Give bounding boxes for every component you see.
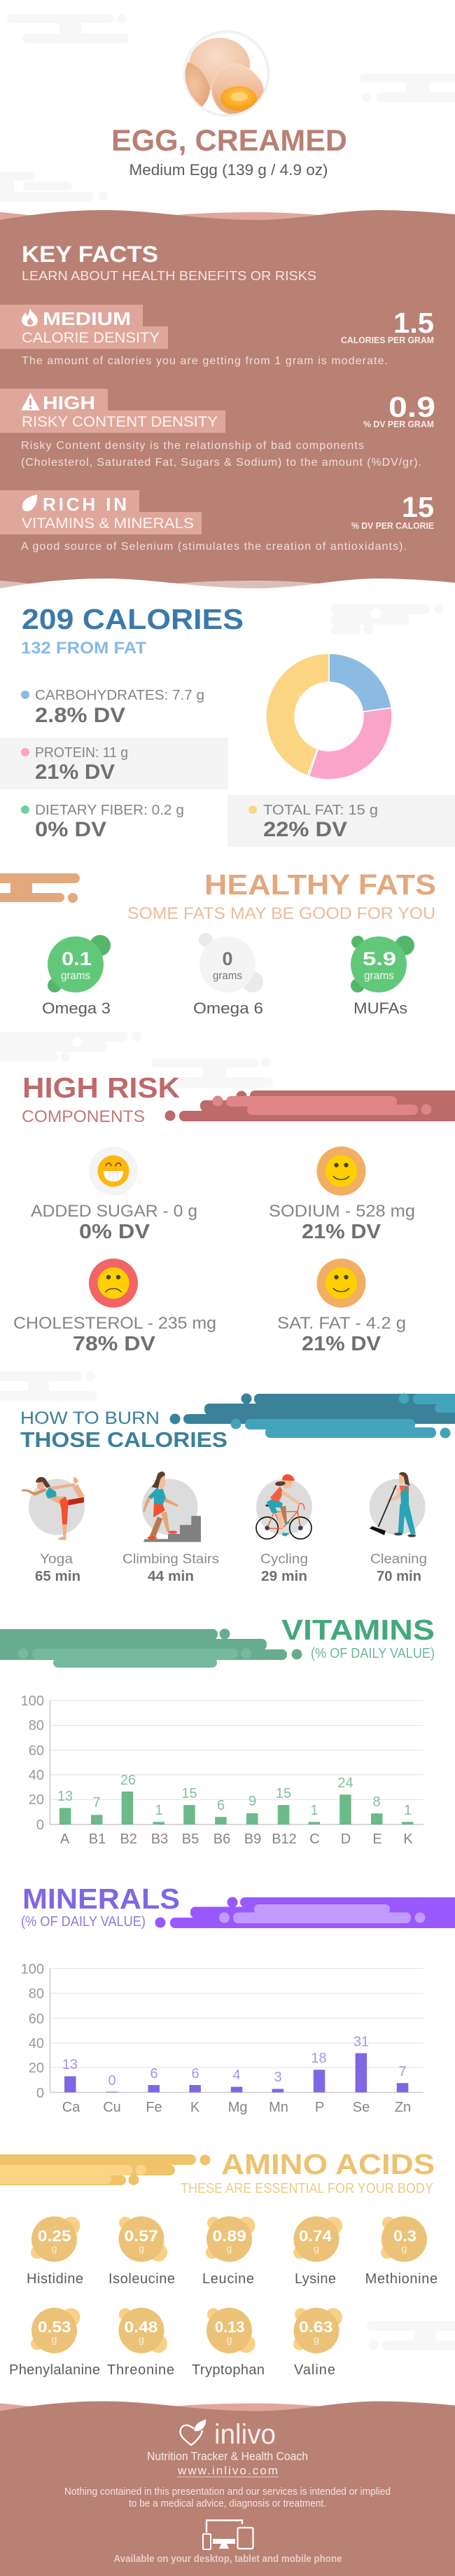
fat: mufas: grams <box>364 970 394 982</box>
value: 0.9: 0.9 <box>388 391 435 423</box>
y axis labels: 100 <box>21 1694 44 1709</box>
icon: frowning face <box>89 1259 138 1308</box>
amino acid: phenylalanine <box>9 2308 100 2378</box>
x axis labels: B9 <box>244 1831 261 1847</box>
bar values: 18 <box>311 2051 327 2066</box>
risk: cholesterol: CHOLESTEROL - 235 mg <box>13 1314 216 1333</box>
bar values: 13 <box>62 2057 78 2072</box>
y axis labels: 80 <box>29 1718 44 1733</box>
subheading: minerals: (% OF DAILY VALUE) <box>21 1914 146 1930</box>
bar values: 6 <box>217 1798 225 1813</box>
x axis labels: D <box>341 1831 351 1847</box>
amino acid: methionine: Methionine <box>365 2271 438 2287</box>
fat: omega 3: 0.1 <box>62 948 92 969</box>
bar values: 15 <box>276 1786 291 1801</box>
x axis labels: A <box>60 1831 70 1847</box>
fat: omega 6 <box>193 933 263 1017</box>
bar values: 7 <box>92 1795 101 1810</box>
amino acid: threonine: Threonine <box>107 2362 174 2378</box>
y axis labels <box>21 1694 44 1833</box>
value: 1.5: 1.5 <box>393 307 434 339</box>
bar values: 1 <box>155 1803 163 1818</box>
bar values: 4 <box>232 2068 241 2083</box>
background cloud: calories <box>331 604 444 635</box>
icon: smiling face <box>316 1147 365 1196</box>
bar values: 8 <box>372 1794 381 1810</box>
risk: cholesterol <box>13 1259 216 1355</box>
amino acid: phenylalanine: 0.53 <box>38 2318 71 2336</box>
bar values: 6 <box>150 2066 158 2082</box>
amino acid: leucine <box>202 2216 255 2287</box>
icon: smiling face <box>316 1259 365 1308</box>
bottom wave of key facts panel <box>0 579 455 602</box>
nutrient: protein: 21% DV <box>35 761 115 784</box>
nutrient: carbohydrates: 2.8% DV <box>35 704 125 727</box>
x axis labels: B2 <box>120 1831 137 1847</box>
x axis labels: Zn <box>395 2100 411 2115</box>
subtitle: Medium Egg (139 g / 4.9 oz) <box>129 161 328 179</box>
amino acid: leucine: 0.89 <box>213 2227 246 2245</box>
bar values: 0 <box>108 2073 116 2089</box>
panel: key facts <box>0 210 455 602</box>
nutrient: carbohydrates: CARBOHYDRATES: 7.7 g <box>35 688 204 703</box>
gridlines <box>50 1701 424 1800</box>
activity: cycling: 29 min <box>261 1569 307 1584</box>
nutrient: dietary fiber <box>21 803 184 841</box>
y axis labels <box>21 1962 44 2101</box>
bar values <box>62 2034 407 2089</box>
icon: cleaning figure <box>370 1472 426 1537</box>
nutrient: total fat: 22% DV <box>263 818 347 841</box>
nutrient: total fat <box>227 795 455 847</box>
disclaimer: Nothing contained in this presentation and our services is intended or implied <box>64 2486 391 2498</box>
risk: saturated fat <box>277 1259 406 1355</box>
x axis labels: Mg <box>228 2100 247 2115</box>
subheading: from fat: 132 FROM FAT <box>21 639 146 658</box>
decoration: minerals pills <box>155 1897 455 1928</box>
risk: sodium <box>269 1147 415 1243</box>
x axis labels: C <box>309 1831 320 1847</box>
label: calorie density: CALORIE DENSITY <box>22 330 160 346</box>
x axis labels: B5 <box>182 1831 199 1847</box>
amino acid: methionine: 0.3 <box>393 2227 416 2245</box>
icon: inlivo heart logo <box>181 2421 205 2445</box>
amino acid: lysine: g <box>314 2243 319 2254</box>
bar values: 1 <box>310 1803 318 1818</box>
label: risky content density: RISKY CONTENT DENSITY <box>22 414 218 430</box>
fact: calorie density <box>0 305 434 367</box>
amino acid: leucine: g <box>227 2243 232 2254</box>
activity: cleaning: 70 min <box>377 1569 421 1584</box>
heading: high risk: HIGH RISK <box>22 1072 180 1104</box>
heading: those calories: THOSE CALORIES <box>20 1428 227 1452</box>
amino acid: phenylalanine: Phenylalanine <box>9 2362 100 2378</box>
panel: footer <box>0 2401 455 2576</box>
description: A good source of Selenium (stimulates the creation of antioxidants). <box>21 541 407 553</box>
activity: cycling <box>256 1474 312 1584</box>
subheading: vitamins: (% OF DAILY VALUE) <box>311 1646 435 1661</box>
label: high: HIGH <box>43 392 95 413</box>
x axis labels: Cu <box>103 2100 121 2115</box>
fat: omega 3: Omega 3 <box>42 999 111 1017</box>
activity: climbing stairs: Climbing Stairs <box>122 1552 219 1567</box>
heading: amino acids: AMINO ACIDS <box>221 2148 435 2180</box>
footer wave <box>0 2401 455 2576</box>
label: medium: MEDIUM <box>43 308 131 329</box>
fact: risky content density <box>0 389 435 469</box>
background cloud: burn <box>0 1371 97 1401</box>
background cloud: amino acids <box>367 2321 455 2350</box>
bar values: 3 <box>274 2070 282 2085</box>
x axis labels: Mn <box>269 2100 288 2115</box>
y axis labels: 60 <box>29 1743 44 1759</box>
activity: yoga: Yoga <box>40 1552 73 1567</box>
amino acid: histidine <box>27 2216 83 2287</box>
background cloud: top right <box>360 74 455 102</box>
heading: 209 calories: 209 CALORIES <box>22 603 244 635</box>
heading: how to burn: HOW TO BURN <box>20 1408 160 1428</box>
decoration: healthy fats pills <box>0 873 80 903</box>
gridlines <box>50 1968 424 2068</box>
x axis labels <box>60 1831 413 1847</box>
y axis labels: 80 <box>29 1986 44 2002</box>
website link: www.inlivo.com <box>177 2464 278 2477</box>
amino acid: valine: 0.63 <box>299 2318 333 2336</box>
activity: yoga <box>22 1477 85 1584</box>
heading: minerals: MINERALS <box>22 1883 180 1915</box>
bar values: 9 <box>248 1794 256 1809</box>
description: Risky Content density is the relationship of bad components <box>21 440 364 452</box>
decoration: vitamins pills <box>0 1629 302 1668</box>
x axis labels <box>62 2100 411 2115</box>
x axis labels: B12 <box>272 1831 297 1847</box>
label band <box>0 490 202 534</box>
y axis labels: 100 <box>21 1962 44 1977</box>
activity: climbing stairs <box>122 1471 219 1584</box>
risk: saturated fat: SAT. FAT - 4.2 g <box>277 1314 406 1333</box>
disclaimer: to be a medical advice, diagnosis or treatment. <box>129 2498 326 2509</box>
icon: devices <box>203 2520 253 2549</box>
risk: sodium: 21% DV <box>302 1221 382 1243</box>
bar chart: minerals <box>21 1962 424 2115</box>
activity: cycling: Cycling <box>260 1552 308 1567</box>
amino acid: histidine: g <box>52 2243 57 2254</box>
bars <box>59 1792 413 1824</box>
label: vitamins and minerals: VITAMINS & MINERALS <box>22 515 194 532</box>
x axis labels: E <box>372 1831 382 1847</box>
fact: rich in vitamins and minerals <box>0 490 434 553</box>
amino acid: methionine <box>365 2216 438 2287</box>
nutrient: carbohydrates <box>21 688 204 727</box>
bar values: 15 <box>181 1786 197 1801</box>
amino acid: tryptophan: Tryptophan <box>192 2362 265 2378</box>
bar chart: vitamins <box>21 1694 424 1847</box>
y axis labels: 20 <box>29 2061 44 2076</box>
activity: cleaning: Cleaning <box>370 1552 427 1567</box>
risk: sodium: SODIUM - 528 mg <box>269 1202 415 1221</box>
title: EGG, CREAMED <box>111 125 347 158</box>
bar values: 1 <box>404 1803 412 1818</box>
amino acid: valine <box>293 2308 342 2378</box>
value unit: CALORIES PER GRAM <box>341 335 434 345</box>
fat: mufas <box>351 936 414 1017</box>
amino acid: threonine <box>107 2308 174 2378</box>
y axis labels: 20 <box>29 1792 44 1808</box>
amino acid: threonine: 0.48 <box>125 2318 158 2336</box>
decoration: amino acids pills <box>0 2154 210 2185</box>
donut chart <box>266 653 392 780</box>
y axis labels: 0 <box>36 1817 44 1833</box>
nutrient: protein <box>0 738 228 789</box>
y axis labels: 40 <box>29 2036 44 2051</box>
nutrient: dietary fiber: 0% DV <box>35 818 106 841</box>
amino acid: tryptophan <box>192 2308 265 2378</box>
value: 15: 15 <box>402 491 434 523</box>
disclaimer <box>64 2486 391 2509</box>
icon: leaf <box>22 494 37 511</box>
icon: climbing stairs figure <box>142 1471 201 1542</box>
subheading: key facts: LEARN ABOUT HEALTH BENEFITS OR RISKS <box>22 268 316 283</box>
top wave of key facts panel <box>0 210 455 595</box>
fat: omega 3: grams <box>61 970 90 982</box>
decoration: burn pills <box>169 1394 455 1439</box>
value unit: % DV PER GRAM <box>363 419 434 429</box>
icon: flame <box>22 308 38 326</box>
logo wordmark: inlivo <box>214 2419 276 2450</box>
amino acid: threonine: g <box>139 2334 144 2345</box>
fat: omega 6: grams <box>213 970 242 982</box>
background cloud: top left <box>7 14 129 43</box>
bars <box>64 2054 408 2093</box>
x axis labels: B6 <box>214 1831 230 1847</box>
icon: egg photo <box>183 32 269 116</box>
bar values: 6 <box>191 2066 200 2082</box>
y axis labels: 40 <box>29 1768 44 1783</box>
amino acid: lysine <box>293 2216 342 2287</box>
amino acid: methionine: g <box>402 2243 407 2254</box>
activity: yoga: 65 min <box>35 1569 80 1584</box>
background cloud: high risk left <box>0 1032 141 1062</box>
x axis labels: B3 <box>151 1831 168 1847</box>
x axis labels: P <box>315 2100 324 2115</box>
nutrient: dietary fiber: DIETARY FIBER: 0.2 g <box>35 803 184 818</box>
risk: added sugar: 0% DV <box>79 1221 150 1243</box>
fat: mufas: 5.9 <box>363 948 396 969</box>
amino acid: isoleucine <box>108 2216 175 2287</box>
risk: added sugar: ADDED SUGAR - 0 g <box>31 1202 197 1221</box>
amino acid: histidine: Histidine <box>27 2271 83 2287</box>
label band <box>0 389 225 433</box>
amino acid: valine: Valine <box>294 2362 335 2378</box>
nutrient: protein: PROTEIN: 11 g <box>35 745 128 761</box>
fat: omega 6: Omega 6 <box>193 999 263 1017</box>
x axis labels: K <box>190 2100 200 2115</box>
icon: yoga figure <box>22 1477 85 1540</box>
amino acid: histidine: 0.25 <box>38 2227 71 2245</box>
fat: omega 3 <box>42 935 111 1017</box>
icon: grinning face <box>89 1147 138 1196</box>
risk: cholesterol: 78% DV <box>73 1333 156 1355</box>
label: rich in: RICH IN <box>43 494 127 515</box>
amino acid: lysine: 0.74 <box>299 2227 332 2245</box>
heading: healthy fats: HEALTHY FATS <box>204 868 436 901</box>
subheading: amino acids: THESE ARE ESSENTIAL FOR YOUR BODY <box>181 2181 433 2196</box>
amino acid: isoleucine: Isoleucine <box>108 2271 175 2287</box>
bar values: 13 <box>57 1789 73 1804</box>
subheading: components: COMPONENTS <box>22 1107 145 1126</box>
amino acid: tryptophan: 0.13 <box>215 2318 245 2336</box>
activity: climbing stairs: 44 min <box>148 1569 194 1584</box>
amino acid: leucine: Leucine <box>202 2271 254 2287</box>
heading: vitamins: VITAMINS <box>281 1614 435 1646</box>
subheading: healthy fats: SOME FATS MAY BE GOOD FOR YOU <box>127 904 435 923</box>
availability note: Available on your desktop, tablet and mobile phone <box>113 2554 342 2565</box>
amino acid: isoleucine: 0.57 <box>125 2227 158 2245</box>
label band <box>0 305 168 349</box>
value unit: % DV PER CALORIE <box>351 520 434 531</box>
description: The amount of calories you are getting from 1 gram is moderate. <box>22 355 388 367</box>
nutrient: total fat: TOTAL FAT: 15 g <box>263 803 378 818</box>
y axis labels: 0 <box>36 2086 44 2101</box>
amino acid: lysine: Lysine <box>295 2271 336 2287</box>
description: (Cholesterol, Saturated Fat, Sugars & Sodium) to the amount (%DV/gr). <box>21 457 421 469</box>
background cloud: high risk center <box>151 1058 273 1088</box>
x axis labels: K <box>403 1831 413 1847</box>
decoration: high risk pills <box>165 1090 455 1121</box>
amino acid: tryptophan: g <box>227 2334 232 2345</box>
amino acid: isoleucine: g <box>139 2243 144 2254</box>
background cloud: left of subtitle <box>0 172 108 202</box>
fat: mufas: MUFAs <box>354 999 407 1017</box>
heading: key facts: KEY FACTS <box>22 242 158 267</box>
x axis labels: B1 <box>89 1831 106 1847</box>
risk: saturated fat: 21% DV <box>302 1333 382 1355</box>
bar values: 26 <box>120 1773 136 1788</box>
fat: omega 6: 0 <box>222 948 233 969</box>
x axis labels: Fe <box>146 2100 162 2115</box>
bar values <box>57 1773 412 1818</box>
description <box>21 440 421 469</box>
x axis labels: Se <box>353 2100 370 2115</box>
bar values: 24 <box>337 1775 354 1791</box>
y axis labels: 60 <box>29 2011 44 2027</box>
risk: added sugar <box>31 1147 197 1243</box>
icon: cycling figure <box>256 1474 312 1539</box>
bar values: 31 <box>354 2034 369 2049</box>
icon: warning triangle <box>21 393 40 410</box>
amino acid: valine: g <box>314 2334 319 2345</box>
tagline: Nutrition Tracker & Health Coach <box>147 2450 308 2463</box>
bar values: 7 <box>398 2064 407 2079</box>
x axis labels: Ca <box>62 2100 80 2115</box>
amino acid: phenylalanine: g <box>52 2334 57 2345</box>
activity: cleaning <box>370 1472 427 1584</box>
